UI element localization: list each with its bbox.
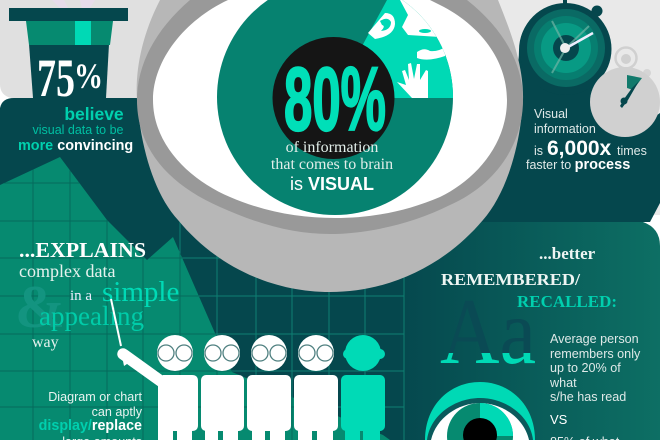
- panel: better remembered: [400, 222, 660, 440]
- text: average person: Average person: [550, 332, 639, 346]
- icon: rabbit ears: [52, 0, 95, 8]
- presenter pointer: [111, 299, 121, 346]
- text: appealing: appealing: [39, 301, 144, 331]
- text: average person: up to 20% of: [550, 361, 621, 375]
- text: information: information: [534, 122, 596, 136]
- text: better: ...better: [539, 244, 596, 263]
- person 5 teal: [341, 335, 385, 440]
- person 1: [157, 335, 198, 440]
- text: average person: remembers only: [550, 347, 641, 361]
- text: ampersand: &: [15, 274, 65, 340]
- text: more convincing: more convincing: [18, 138, 133, 154]
- stopwatch: grey: [590, 48, 660, 137]
- text: that comes to brain: that comes to brain: [271, 156, 393, 173]
- text: way: way: [32, 334, 59, 351]
- panel: dark teal body: [0, 98, 530, 440]
- panel: stopwatch backing: [500, 4, 660, 222]
- text: Visual information: Visual: [534, 107, 568, 121]
- needle: [620, 81, 639, 108]
- text: average person: VS: [550, 412, 568, 427]
- eyelid: [425, 382, 535, 440]
- iris quadrant: [480, 403, 513, 436]
- grid on dark: [180, 222, 404, 440]
- text: average person: s/he has read: [550, 390, 626, 404]
- background: light grey top left: [0, 0, 300, 98]
- ear: [368, 13, 395, 39]
- text: of information: of information: [286, 139, 378, 156]
- stat: 6,000x times: is: [534, 144, 543, 158]
- stat: 75%: 75: [37, 48, 75, 108]
- background: light grey top right: [300, 0, 660, 215]
- ear inner: [380, 19, 391, 31]
- eye: outer grey: [137, 0, 523, 292]
- text: diagram description: display/replace: [39, 418, 142, 434]
- text: believe: believe: [64, 104, 124, 124]
- wedge: [627, 75, 642, 90]
- heading: REMEMBERED: REMEMBERED/: [441, 270, 580, 289]
- text: average person: what: [549, 376, 577, 390]
- text: complex data: complex data: [19, 261, 115, 281]
- hat brim: [9, 8, 128, 21]
- watch hands: [552, 21, 589, 73]
- panel: green chalkboard: [0, 157, 390, 440]
- hat stripe: [75, 21, 91, 45]
- text: is VISUAL: is VISUAL: [290, 174, 374, 194]
- watch rings: [520, 3, 612, 95]
- people row: [111, 299, 385, 440]
- stat: 80%: 80%: [284, 50, 386, 150]
- text: faster to process: faster to process: [526, 157, 630, 173]
- grid on green: [0, 170, 294, 440]
- stat: 75%: %: [74, 56, 103, 96]
- eye: white sclera: [153, 0, 507, 218]
- nostril: [419, 29, 431, 33]
- heading: EXPLAINS: ...EXPLAINS: [19, 238, 146, 262]
- icon: magician hat: [9, 8, 128, 98]
- hat crown: [29, 44, 109, 98]
- text: diagram description: can aptly: [92, 405, 143, 419]
- presenter arm: [123, 354, 162, 382]
- hat band: [26, 21, 113, 45]
- grey ring and knob: [616, 48, 636, 68]
- mouth: [417, 47, 445, 60]
- text: in a: in a: [70, 288, 92, 304]
- iris: [447, 403, 513, 440]
- eye: grey ring: [137, 0, 523, 234]
- heading: RECALLED: RECALLED:: [517, 292, 617, 311]
- icon: bottom eye: [425, 382, 535, 440]
- lid shadow: [427, 398, 533, 440]
- text: simple: simple: [102, 276, 179, 308]
- typography sample: Aa teal: Aa: [440, 280, 536, 384]
- text: average person: [549, 332, 641, 440]
- text: diagram description: [39, 390, 143, 440]
- illustration: face in iris: [363, 0, 453, 98]
- teal wedge: [363, 0, 453, 98]
- grey face: [590, 67, 660, 137]
- stat: 6,000x times: 6,000x: [547, 137, 612, 160]
- stopwatch: teal: [520, 0, 612, 95]
- person 2: [201, 335, 244, 440]
- text: visual data to be: visual data to be: [32, 123, 124, 137]
- typography sample: Aa dark: Aa: [440, 280, 536, 384]
- sclera: [431, 403, 529, 440]
- person 3: [247, 335, 291, 440]
- hand: [397, 63, 428, 98]
- pupil: [463, 418, 497, 440]
- eye: iris: [217, 0, 453, 215]
- stat: 6,000x times: times: [617, 144, 647, 158]
- black pupil: [272, 37, 394, 159]
- person 4: [294, 335, 338, 440]
- knobs: [563, 0, 567, 6]
- white face: [400, 0, 436, 37]
- text: diagram description: Diagram or chart: [48, 390, 142, 404]
